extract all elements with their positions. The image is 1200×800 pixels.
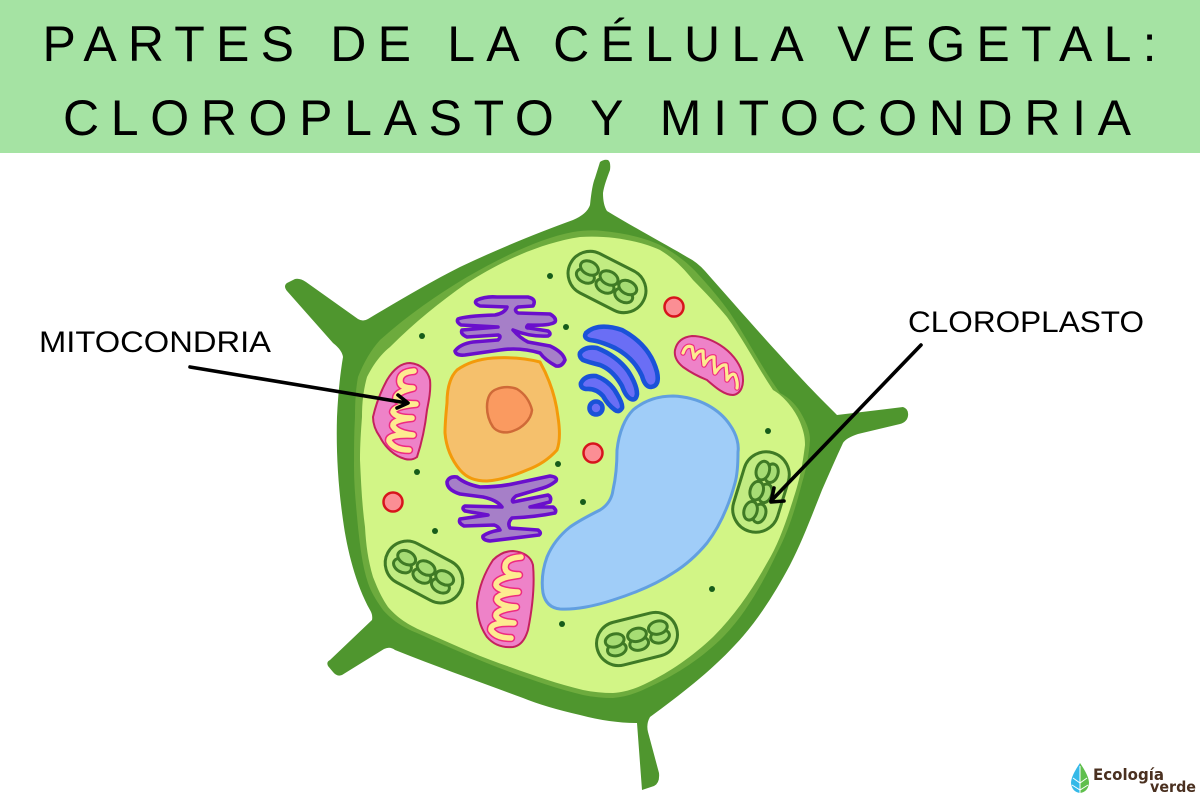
endoplasmic reticulum / golgi: top: [455, 297, 565, 366]
golgi apparatus: [580, 327, 658, 414]
ribosome dots: [414, 273, 771, 627]
mitochondrion: left: [373, 363, 430, 460]
logo: Ecología verde: verde: [1150, 778, 1196, 796]
chloroplast: right: [727, 446, 795, 538]
cell membrane band: [354, 230, 810, 698]
logo: Ecología verde: [1071, 763, 1196, 796]
label: cloroplasto: CLOROPLASTO: [908, 306, 1144, 339]
title banner: PARTES DE LA CÉLULA VEGETAL:: [42, 16, 1156, 72]
plant cell diagram: [285, 160, 908, 790]
chloroplast: top: [560, 244, 654, 320]
cell wall with spikes: [285, 160, 908, 790]
arrow: cloroplasto: [771, 345, 921, 502]
cytoplasm: [360, 237, 805, 693]
icon: leaf: [1071, 763, 1089, 793]
label: mitocondria: MITOCONDRIA: [39, 326, 271, 359]
title banner: CLOROPLASTO Y MITOCONDRIA: [63, 90, 1132, 146]
nucleus: [445, 358, 559, 481]
title banner: [0, 0, 1200, 153]
chloroplast: lower left: [377, 533, 471, 611]
mitochondrion: bottom: [477, 551, 534, 647]
arrow: mitocondria: [190, 367, 408, 408]
red vesicles: [384, 298, 684, 512]
mitochondrion: right: [675, 336, 743, 395]
endoplasmic reticulum / golgi: bottom: [447, 476, 556, 541]
vacuole: [542, 396, 738, 609]
logo: Ecología verde: Ecología: [1093, 765, 1164, 784]
chloroplast: bottom: [592, 608, 682, 670]
nucleolus: [487, 387, 532, 432]
